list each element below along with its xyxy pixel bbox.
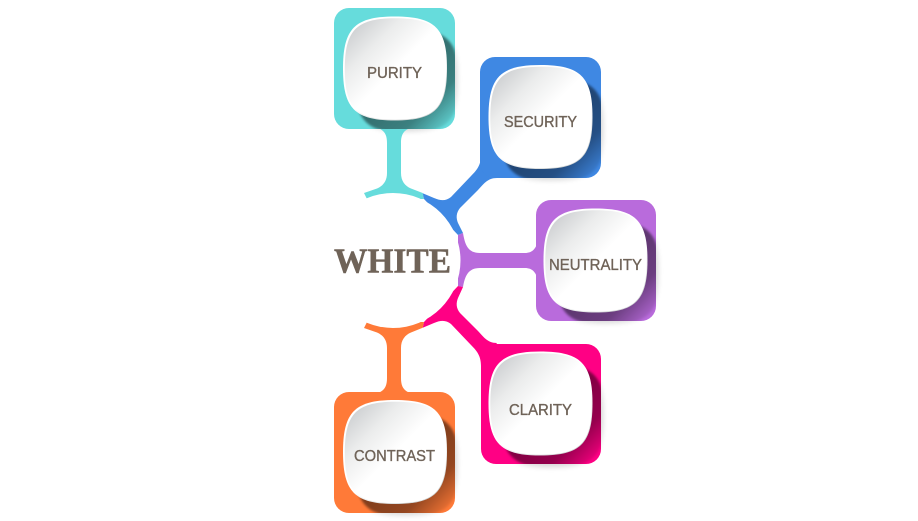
branch: purity bbox=[334, 8, 459, 199]
label: clarity: CLARITY bbox=[509, 402, 572, 419]
soft outer shadow bbox=[499, 76, 603, 180]
branch: security bbox=[423, 57, 605, 235]
connector: security bbox=[423, 155, 497, 235]
cast shadow bbox=[504, 368, 601, 464]
box: neutrality bbox=[536, 200, 656, 321]
connector: neutrality bbox=[458, 233, 538, 287]
label: contrast: CONTRAST bbox=[354, 448, 435, 465]
soft outer shadow bbox=[353, 27, 457, 131]
card: neutrality bbox=[544, 208, 648, 312]
card: purity bbox=[343, 16, 447, 120]
label: security: SECURITY bbox=[504, 114, 577, 131]
connector: purity bbox=[364, 127, 424, 199]
label: neutrality: NEUTRALITY bbox=[549, 257, 642, 274]
box: clarity bbox=[481, 344, 601, 464]
cast shadow bbox=[358, 416, 455, 513]
branch: clarity bbox=[423, 286, 605, 468]
connector: clarity bbox=[423, 286, 497, 366]
branch: neutrality bbox=[458, 200, 660, 325]
cast shadow bbox=[560, 224, 656, 321]
branch: contrast bbox=[334, 322, 459, 517]
cast shadow bbox=[358, 33, 455, 129]
card: security bbox=[488, 65, 592, 169]
card: contrast bbox=[343, 400, 447, 504]
connector: contrast bbox=[364, 322, 424, 394]
soft outer shadow bbox=[353, 411, 457, 515]
cast shadow bbox=[504, 82, 601, 178]
soft outer shadow bbox=[499, 363, 603, 467]
card: clarity bbox=[488, 352, 592, 456]
box: security bbox=[480, 57, 601, 178]
box: contrast bbox=[334, 392, 455, 513]
box: purity bbox=[334, 8, 455, 129]
title: WHITE bbox=[334, 242, 451, 280]
soft outer shadow bbox=[554, 219, 658, 323]
center circle bbox=[326, 193, 460, 328]
label: purity: PURITY bbox=[367, 65, 422, 82]
